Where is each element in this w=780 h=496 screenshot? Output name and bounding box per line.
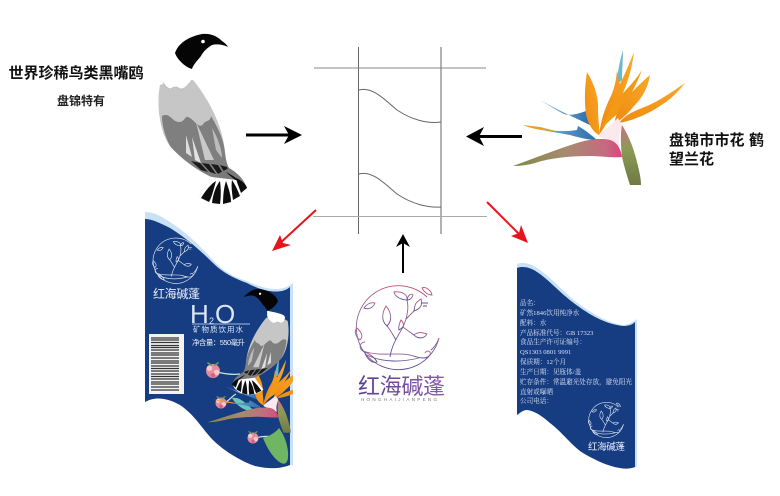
heading: rare bird: 世界珍稀鸟类黑嘴鸥	[8, 64, 144, 82]
pink flowers	[206, 363, 258, 444]
arrow: flower to dieline	[466, 127, 522, 146]
product details: 品名：	[520, 298, 540, 307]
logo mark	[355, 286, 439, 370]
label flower	[208, 360, 293, 433]
product details: 食品生产许可证编号：	[520, 337, 586, 346]
arrow: logo to dieline	[396, 234, 410, 273]
product name H2O: O	[215, 299, 235, 329]
arrow: bird to dieline	[246, 126, 302, 144]
label body	[145, 219, 290, 468]
product details: 生产日期：见瓶体/盖	[520, 367, 582, 376]
logo: Honghai Jianpeng	[355, 286, 445, 402]
product name H2O: 矿物质饮用水	[193, 324, 244, 334]
product details	[520, 298, 632, 405]
net content: 净含量：550毫升	[192, 337, 246, 347]
label bird	[232, 289, 289, 394]
arrow: dieline to front label	[272, 210, 316, 251]
product name H2O: H	[190, 299, 209, 329]
brand name: 红海碱蓬	[588, 441, 625, 453]
icon: bird of paradise flower	[513, 50, 685, 185]
product details: 产品标准代号：GB 17323	[520, 328, 594, 337]
label body	[517, 267, 635, 469]
product details: QS1303 0801 9991	[520, 349, 571, 356]
caption: city flower: 望兰花	[669, 150, 714, 168]
barcode	[149, 334, 184, 394]
product details: 贮存条件：常温避光处存放，避免阳光	[520, 377, 632, 387]
panel: back label	[517, 263, 637, 469]
product details: 公司电话：	[520, 396, 553, 405]
label edge highlight	[517, 263, 637, 469]
label edge highlight	[145, 212, 293, 468]
logo: small	[588, 402, 623, 438]
product details: 矿然1846饮用纯净水	[520, 308, 580, 317]
logo: small	[153, 238, 198, 283]
caption: city flower	[669, 131, 764, 168]
product name H2O	[190, 299, 250, 334]
product details: 直射或曝晒	[520, 387, 553, 396]
panel: front label	[145, 212, 293, 468]
teal leaves	[232, 398, 256, 412]
brand name: 红海碱蓬	[153, 286, 200, 301]
logo pinyin: HONGHAIJIANPENG	[361, 397, 437, 402]
subheading: Panjin native: 盘锦特有	[57, 93, 105, 108]
product details: 保质期：12个月	[520, 357, 566, 366]
product name H2O: 2	[209, 316, 214, 326]
product details: 配料：水	[520, 318, 547, 327]
decoration stems	[217, 372, 274, 438]
logo wordmark: 红海碱蓬	[358, 374, 445, 399]
dieline sketch	[313, 47, 487, 234]
icon: black-billed gull	[158, 34, 247, 204]
leaf	[263, 428, 288, 464]
caption: city flower: 盘锦市市花 鹤	[669, 131, 764, 149]
arrow: dieline to back label	[487, 202, 528, 243]
